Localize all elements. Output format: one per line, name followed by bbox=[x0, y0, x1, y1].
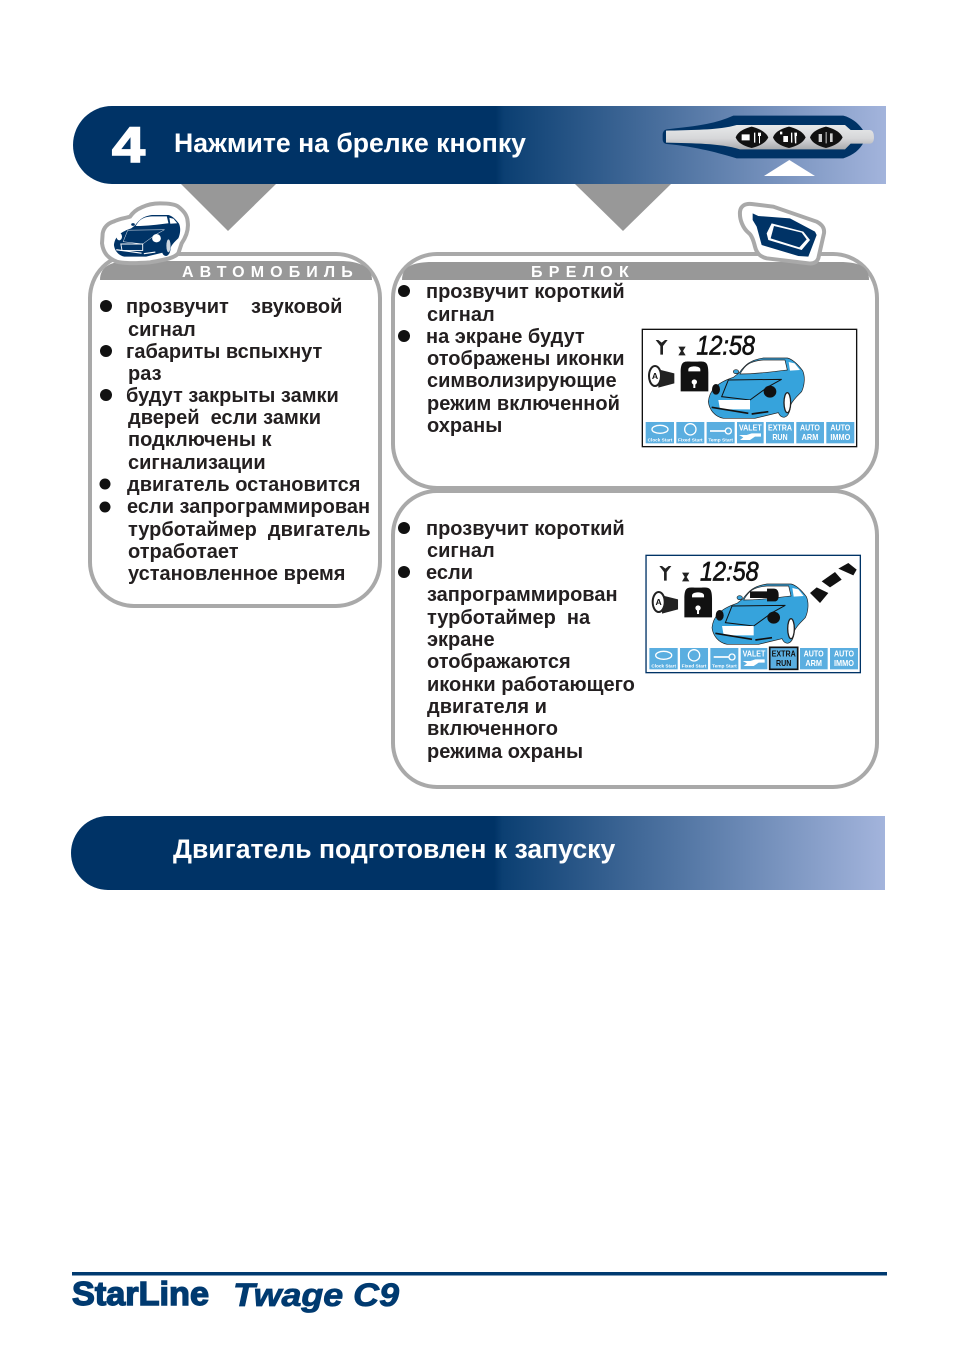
bullet list: car: габариты вспыхнут bbox=[126, 341, 323, 363]
bullet list: car: если запрограммирован bbox=[127, 496, 370, 518]
header title: Нажмите на брелке кнопку bbox=[174, 128, 526, 158]
bullet list: car: сигнал bbox=[128, 319, 196, 341]
LCD screen: engine running: AUTO bbox=[804, 649, 824, 659]
bullet list: car: дверей если замки bbox=[128, 407, 321, 429]
LCD screen: engine running bbox=[646, 555, 860, 673]
bullet list: car: прозвучит bbox=[126, 296, 229, 318]
LCD screen: armed: VALET bbox=[739, 422, 762, 432]
bullet list: fob status 2: режима охраны bbox=[427, 741, 583, 763]
bullet list: car: будут закрыты замки bbox=[126, 385, 339, 407]
LCD screen: armed: Temp Start bbox=[708, 437, 733, 443]
LCD screen: armed: AUTO bbox=[800, 423, 820, 433]
panel heading strip bbox=[100, 261, 372, 280]
bullet list: fob status 2: экране bbox=[427, 629, 495, 651]
LCD screen: engine running: VALET bbox=[743, 648, 765, 658]
bullet list: car: двигатель остановится bbox=[127, 474, 360, 496]
bullet list: car: сигнализации bbox=[128, 452, 266, 474]
bullet list: car: установленное время bbox=[128, 563, 345, 585]
LCD screen: armed bbox=[642, 329, 857, 447]
bullet list: fob status 2: запрограммирован bbox=[427, 584, 618, 606]
panel: key fob status 1 bbox=[393, 204, 877, 488]
icon: key fob bbox=[740, 204, 824, 263]
panel heading: АВТОМОБИЛЬ bbox=[182, 264, 359, 281]
bullet list: fob status 2: включенного bbox=[427, 718, 558, 740]
panel heading strip bbox=[402, 262, 869, 280]
step number: 4 bbox=[112, 117, 145, 173]
LCD screen: engine running: ARM bbox=[805, 658, 822, 668]
panel: car bbox=[90, 203, 380, 606]
LCD screen: armed: EXTRA bbox=[768, 423, 792, 433]
LCD screen: armed: Fixed Start bbox=[678, 437, 703, 443]
LCD screen: armed: RUN bbox=[772, 432, 788, 442]
LCD screen: engine running: EXTRA bbox=[772, 649, 796, 659]
bullet list: fob status 1: на экране будут bbox=[426, 326, 585, 348]
bullet list: fob status 1: прозвучит короткий bbox=[426, 281, 625, 303]
LCD screen: engine running: 12:58 bbox=[700, 557, 759, 587]
LCD screen: engine running: A bbox=[656, 597, 663, 607]
bullet list: fob status 1: символизирующие bbox=[427, 370, 617, 392]
LCD screen: engine running: RUN bbox=[776, 658, 791, 668]
header banner: step 4 bbox=[73, 106, 886, 184]
bullet list: car: подключены к bbox=[128, 429, 272, 451]
icon: key fob with buttons bbox=[663, 116, 874, 176]
bullet list: fob status 2: прозвучит короткий bbox=[426, 518, 625, 540]
result banner bbox=[71, 816, 885, 890]
panel heading: БРЕЛОК bbox=[531, 264, 635, 281]
LCD screen: engine running: Clock Start bbox=[651, 663, 676, 669]
LCD screen: armed: ARM bbox=[802, 432, 818, 442]
bullet list: fob status 2: иконки работающего bbox=[427, 674, 635, 696]
bullet list: car bbox=[100, 296, 371, 585]
bullet list: car: раз bbox=[128, 363, 162, 385]
footer model name: Twage C9 bbox=[233, 1277, 399, 1313]
bullet list: fob status 2: турботаймер на bbox=[427, 607, 591, 629]
bullet list: fob status 1: охраны bbox=[427, 415, 502, 437]
LCD screen: armed: A bbox=[652, 371, 659, 381]
bullet list: fob status 2: сигнал bbox=[427, 540, 495, 562]
bullet list: fob status 2 bbox=[398, 518, 635, 763]
footer rule bbox=[72, 1272, 887, 1276]
arrow: down to fob panel bbox=[575, 184, 671, 231]
bullet list: fob status 1: режим включенной bbox=[427, 393, 620, 415]
LCD screen: engine running: Temp Start bbox=[712, 663, 737, 669]
bullet list: fob status 1: отображены иконки bbox=[427, 348, 625, 370]
bullet list: fob status 2: отображаются bbox=[427, 651, 571, 673]
LCD screen: engine running: AUTO bbox=[834, 649, 854, 659]
panel: key fob status 2 bbox=[393, 491, 877, 787]
LCD screen: armed: 12:58 bbox=[696, 331, 755, 361]
bullet list: car: звуковой bbox=[251, 296, 342, 318]
LCD screen: armed: IMMO bbox=[830, 432, 851, 442]
footer logo: StarLine: StarLine bbox=[72, 1275, 209, 1312]
LCD screen: engine running: Fixed Start bbox=[682, 663, 707, 669]
bullet list: fob status 1: сигнал bbox=[427, 304, 495, 326]
result text: Двигатель подготовлен к запуску bbox=[173, 834, 615, 864]
LCD screen: armed: Clock Start bbox=[648, 437, 673, 443]
white triangle pointer bbox=[764, 160, 815, 176]
LCD screen: engine running: IMMO bbox=[834, 658, 854, 668]
bullet list: car: турботаймер двигатель bbox=[128, 519, 371, 541]
bullet list: fob status 2: двигателя и bbox=[427, 696, 547, 718]
bullet list: fob status 2: если bbox=[426, 562, 473, 584]
bullet list: fob status 1 bbox=[398, 281, 625, 437]
icon: car bbox=[102, 203, 188, 263]
LCD screen: armed: AUTO bbox=[830, 423, 851, 433]
arrow: down to car panel bbox=[181, 184, 276, 231]
bullet list: car: отработает bbox=[128, 541, 239, 563]
